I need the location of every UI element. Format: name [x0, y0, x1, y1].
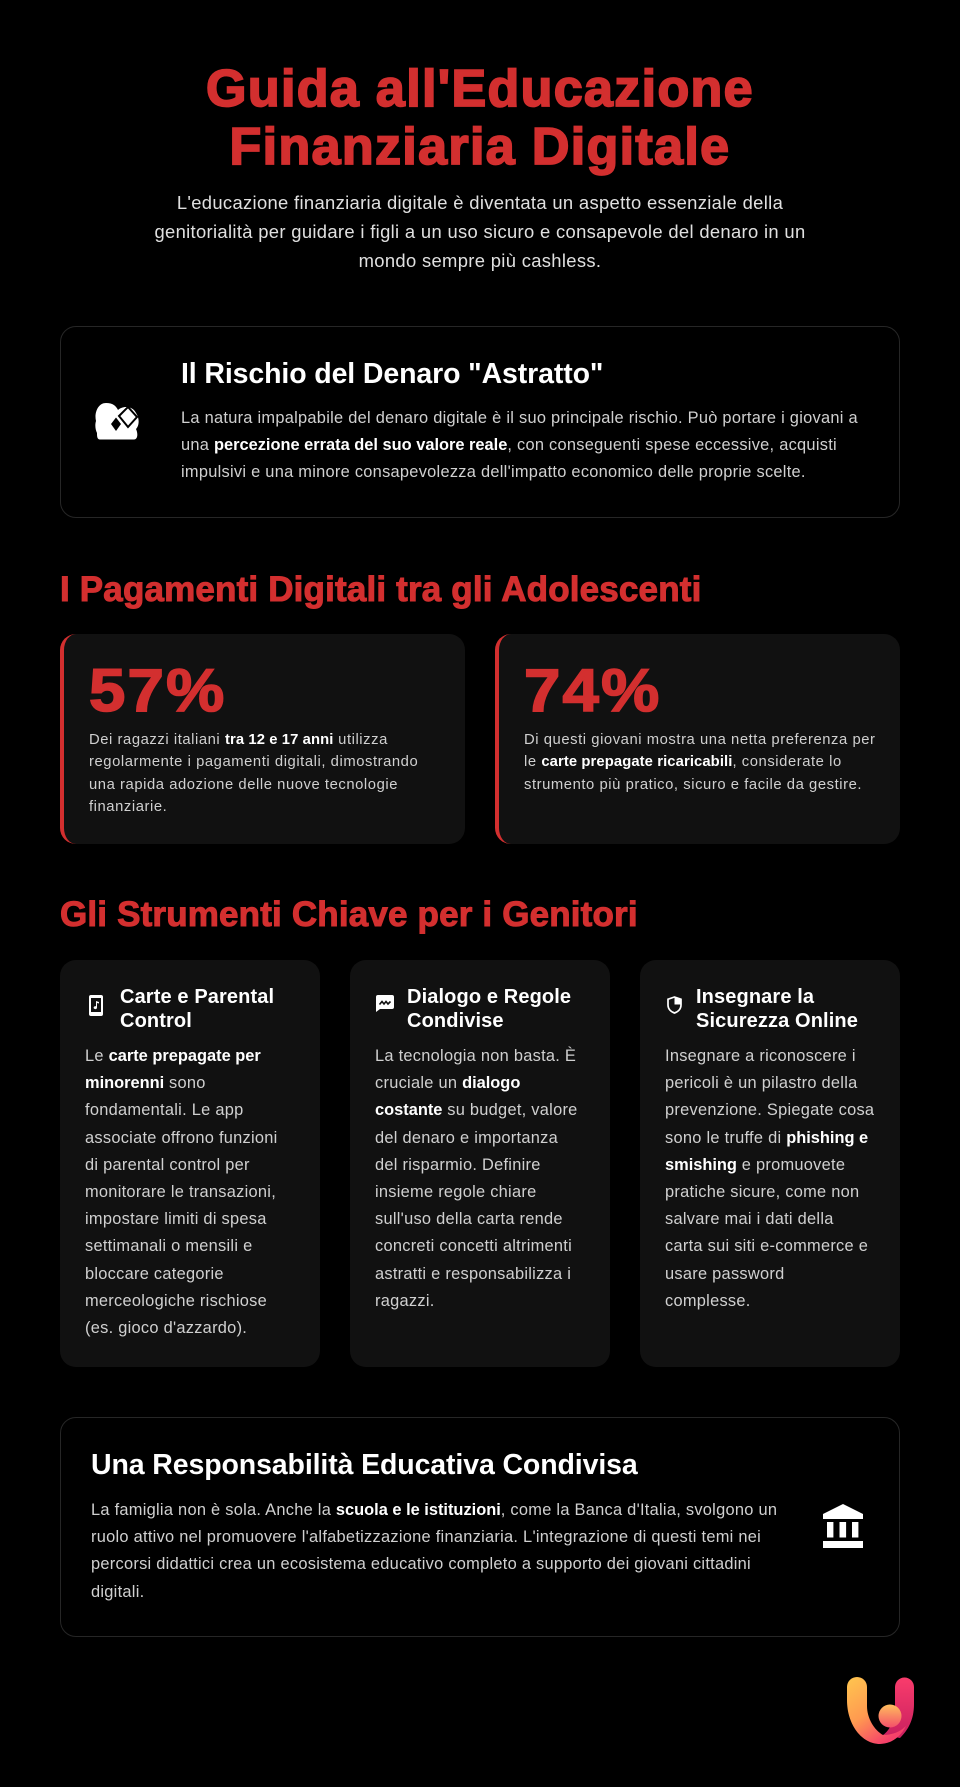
card text: concreti concetti altrimenti [375, 1237, 572, 1255]
stat text: finanziarie. [89, 799, 167, 815]
card text: sono le truffe di phishing e [665, 1129, 868, 1147]
card title: Sicurezza Online [696, 1010, 858, 1032]
icon: shield [667, 996, 682, 1014]
icon: phone [89, 995, 103, 1016]
stat number: 74% [524, 657, 661, 724]
intro text: L'educazione finanziaria digitale è diventata un aspetto essenziale della [177, 192, 783, 213]
card text: monitorare le transazioni, [85, 1183, 276, 1201]
right arm [883, 1678, 914, 1738]
intro text: mondo sempre più cashless. [359, 250, 601, 271]
card text: del risparmio. Definire [375, 1156, 541, 1174]
stat text [524, 732, 876, 793]
card text: costante su budget, valore [375, 1101, 578, 1119]
card title: Control [120, 1010, 192, 1032]
stat text: regolarmente i pagamenti digitali, dimostrando [89, 754, 418, 770]
card text: fondamentali. Le app [85, 1101, 244, 1119]
left arm [847, 1677, 906, 1744]
card text [375, 1046, 578, 1310]
card title: Insegnare la [696, 986, 814, 1008]
card title: Condivise [407, 1010, 504, 1032]
card text [665, 1047, 874, 1310]
intro text [154, 192, 806, 271]
panel: cards and parental control [60, 960, 320, 1367]
card text: del denaro e importanza [375, 1129, 558, 1147]
card text: pericoli è un pilastro della [665, 1074, 858, 1092]
icon: institution [823, 1504, 863, 1548]
text block: impulsivi e una minore consapevolezza dell'impatto economico delle proprie scelte. [181, 463, 806, 481]
card text: ragazzi. [375, 1292, 435, 1310]
card text: usare password [665, 1265, 784, 1283]
stat text: una rapida adozione delle nuove tecnologie [89, 777, 398, 793]
panel: dialogue and rules [350, 960, 610, 1367]
card text: prevenzione. Spiegate cosa [665, 1101, 874, 1119]
stat text: le carte prepagate ricaricabili, considerate lo [524, 754, 842, 770]
panel: stat 74% [495, 634, 900, 844]
card text: complesse. [665, 1292, 751, 1310]
card text: astratti e responsabilizza i [375, 1265, 571, 1283]
card title [696, 986, 858, 1032]
panel: shared responsibility [60, 1417, 900, 1637]
icon: cloud with diamonds [95, 403, 139, 440]
card text: bloccare categorie [85, 1265, 224, 1283]
stat text: Di questi giovani mostra una netta preferenza per [524, 732, 876, 748]
heading: key tools: Gli Strumenti Chiave per i Genitori [60, 895, 638, 934]
card text: insieme regole chiare [375, 1183, 536, 1201]
ball [878, 1704, 902, 1728]
heading: digital payments: I Pagamenti Digitali tra gli Adolescenti [60, 570, 701, 609]
card text: merceologiche rischiose [85, 1292, 267, 1310]
card title [120, 986, 274, 1032]
card text [85, 1047, 278, 1337]
text block: digitali. [91, 1583, 144, 1601]
heading: Il Rischio del Denaro "Astratto" [181, 358, 603, 390]
intro text: genitorialità per guidare i figli a un uso sicuro e consapevole del denaro in un [154, 221, 806, 242]
text block: La natura impalpabile del denaro digitale è il suo principale rischio. Può portare i giovani a [181, 409, 858, 427]
text block [181, 409, 858, 481]
panel: stat 57% [60, 634, 465, 844]
card text: associate offrono funzioni [85, 1129, 278, 1147]
text block: La famiglia non è sola. Anche la scuola e le istituzioni, come la Banca d'Italia, svolgono un [91, 1501, 777, 1519]
card text: minorenni sono [85, 1074, 206, 1092]
card text: salvare mai i dati della [665, 1210, 834, 1228]
heading: Una Responsabilità Educativa Condivisa [91, 1449, 638, 1481]
card text: carta sui siti e-commerce e [665, 1237, 868, 1255]
panel: online safety [640, 960, 900, 1367]
title: Guida all'Educazione [206, 60, 754, 118]
card text: cruciale un dialogo [375, 1074, 520, 1092]
text block: ruolo attivo nel promuovere l'alfabetizzazione finanziaria. L'integrazione di questi temi nei [91, 1528, 761, 1546]
stat text: strumento più pratico, sicuro e facile da gestire. [524, 777, 862, 793]
card text: settimanali o mensili e [85, 1237, 252, 1255]
card text: impostare limiti di spesa [85, 1210, 267, 1228]
text block [91, 1501, 777, 1601]
card text: (es. gioco d'azzardo). [85, 1319, 247, 1337]
card text: sull'uso della carta rende [375, 1210, 563, 1228]
card title: Carte e Parental [120, 986, 274, 1008]
card text: pratiche sicure, come non [665, 1183, 859, 1201]
stat text [89, 732, 418, 815]
card text: Le carte prepagate per [85, 1047, 261, 1065]
card text: smishing e promuovete [665, 1156, 845, 1174]
card text: La tecnologia non basta. È [375, 1047, 576, 1065]
icon: chat [376, 995, 394, 1012]
card text: di parental control per [85, 1156, 250, 1174]
card title [407, 986, 571, 1032]
text block: una percezione errata del suo valore reale, con conseguenti spese eccessive, acquisti [181, 436, 837, 454]
panel: abstract money risk [60, 326, 900, 518]
logo [847, 1677, 914, 1744]
stat number: 57% [89, 657, 226, 724]
text block: percorsi didattici crea un ecosistema educativo completo a supporto dei giovani cittadini [91, 1555, 751, 1573]
title [206, 60, 754, 176]
card title: Dialogo e Regole [407, 986, 571, 1008]
stat text: Dei ragazzi italiani tra 12 e 17 anni utilizza [89, 732, 388, 748]
card text: Insegnare a riconoscere i [665, 1047, 856, 1065]
title: Finanziaria Digitale [230, 118, 730, 176]
